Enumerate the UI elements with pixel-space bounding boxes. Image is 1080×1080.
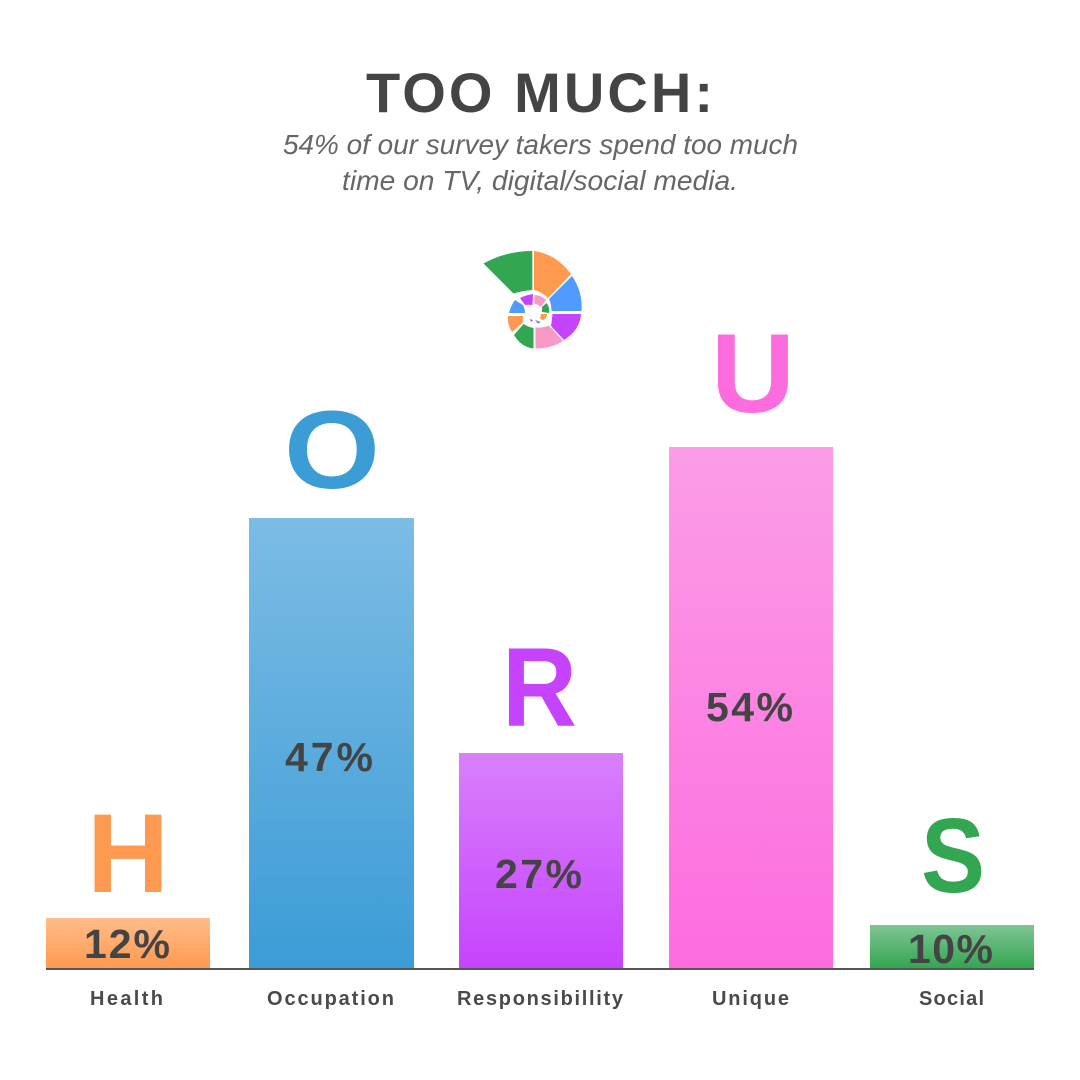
bar: Health: [46, 791, 210, 1010]
bar: Responsibillity: Responsibillity: [457, 988, 624, 1010]
subtitle: 54% of our survey takers spend too much: [283, 129, 798, 160]
bar: Responsibillity: [457, 625, 624, 1010]
bar: Occupation: O: [284, 389, 380, 512]
subtitle: time on TV, digital/social media.: [342, 165, 738, 196]
bar: Unique: Unique: [712, 988, 789, 1010]
title: TOO MUCH:: [366, 61, 713, 124]
bar: Responsibillity: 27%: [495, 851, 582, 897]
bar: Occupation: [249, 389, 414, 1010]
bar: Health: Health: [90, 988, 163, 1010]
bar: Occupation: Occupation: [267, 988, 394, 1010]
bar: Social: Social: [919, 988, 984, 1010]
bar: Health: H: [87, 791, 169, 916]
bar: Social: [870, 797, 1034, 1010]
subtitle: [283, 129, 798, 196]
bar: Occupation: 47%: [285, 734, 373, 780]
bar: Unique: U: [711, 311, 795, 436]
bar: Social: S: [921, 797, 985, 915]
bar: Health: 12%: [84, 921, 170, 967]
bar: Unique: [669, 311, 833, 1010]
bar chart: [46, 311, 1034, 1010]
icon: nautilus shell logo: [484, 251, 582, 349]
bar: Responsibillity: R: [502, 625, 577, 750]
bar: Unique: 54%: [706, 684, 793, 730]
bar: Social: 10%: [908, 926, 993, 972]
